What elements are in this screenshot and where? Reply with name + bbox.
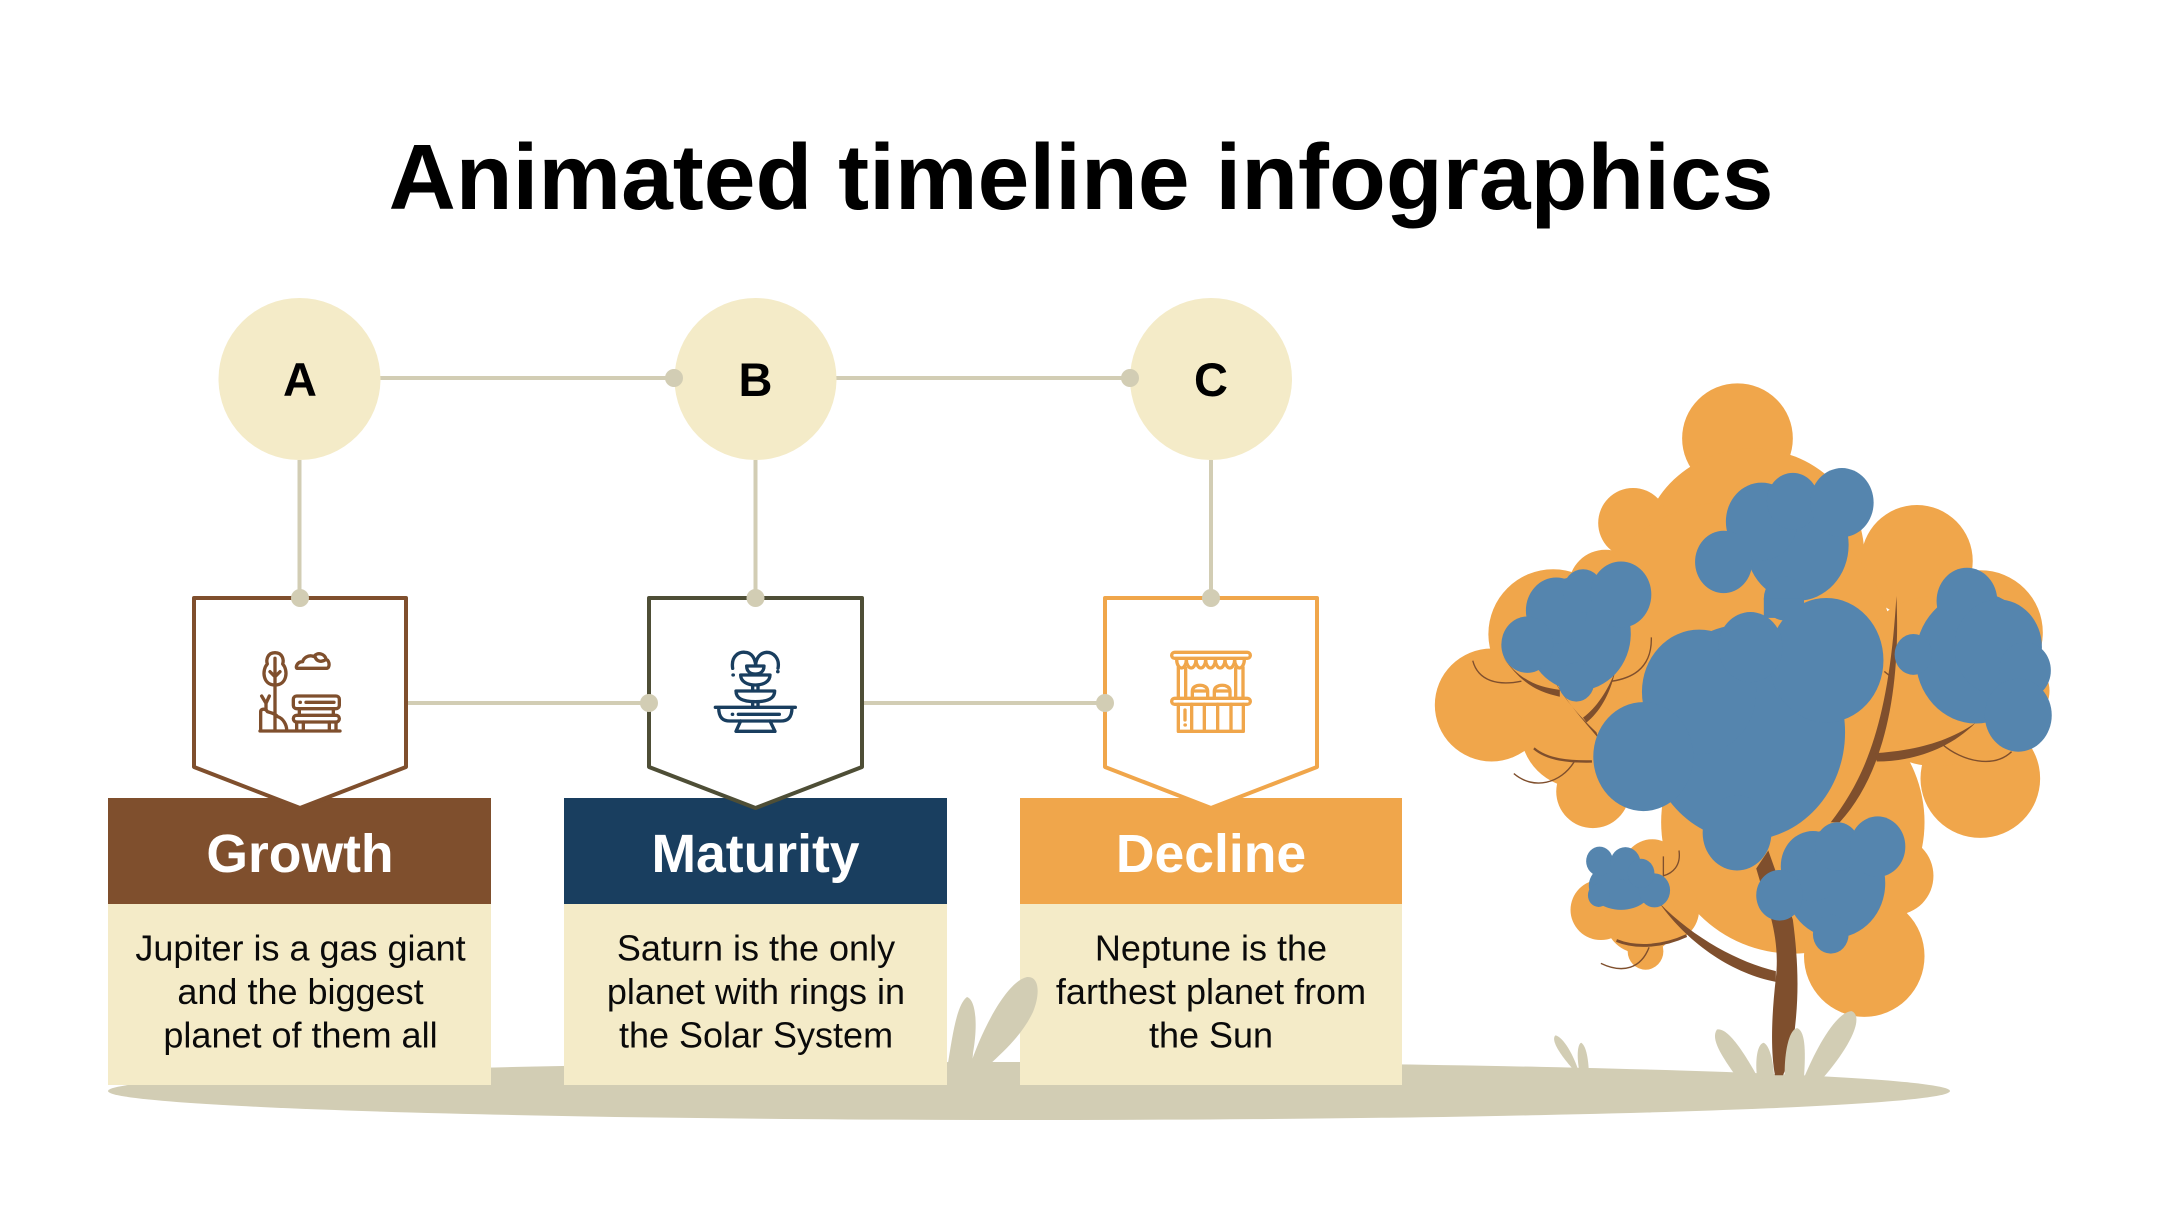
- panel: growth card: Growth: [206, 825, 394, 884]
- trunk and branches: [1503, 596, 1976, 1075]
- connector lines: [300, 378, 1211, 703]
- panel: maturity card: [564, 798, 947, 1085]
- grass tufts: [1554, 1011, 1856, 1080]
- circle B: [674, 298, 836, 460]
- panel: growth card: Jupiter is a gas giant: [135, 928, 466, 968]
- panel: maturity card: planet with rings in: [607, 971, 905, 1012]
- blue foliage: [1501, 468, 2052, 954]
- orange foliage: [1435, 383, 2050, 1017]
- panel: maturity card: the Solar System: [619, 1014, 893, 1056]
- tree illustration: [1435, 383, 2052, 1080]
- circle B: B: [739, 353, 772, 406]
- panel: maturity card: Maturity: [651, 825, 860, 884]
- panel: growth card: [108, 798, 491, 1085]
- circle A: A: [283, 353, 317, 406]
- shield A: [194, 598, 406, 808]
- panel: decline card: farthest planet from: [1056, 971, 1366, 1012]
- circle A: [218, 298, 380, 460]
- panel: growth card: planet of them all: [163, 1014, 438, 1056]
- circle C: [1130, 298, 1292, 460]
- panel: growth card: and the biggest: [177, 971, 424, 1012]
- icon: fountain: [715, 652, 795, 731]
- plant between cards: [948, 977, 1038, 1066]
- thin twigs: [1473, 637, 2012, 969]
- panel: maturity card: Saturn is the only: [617, 928, 895, 968]
- shield C: [1105, 598, 1317, 808]
- ground: [108, 1062, 1950, 1120]
- shield B: [649, 598, 862, 808]
- panel: decline card: [1020, 798, 1402, 1085]
- panel: decline card: the Sun: [1149, 1014, 1273, 1056]
- icon: market stall: [1172, 652, 1250, 731]
- connector dots: [291, 369, 1220, 712]
- panel: decline card: Neptune is the: [1095, 928, 1327, 968]
- icon: park bench and tree: [260, 653, 340, 731]
- title: Animated timeline infographics: [389, 125, 1773, 229]
- circle C: C: [1194, 353, 1228, 406]
- panel: decline card: Decline: [1116, 825, 1306, 884]
